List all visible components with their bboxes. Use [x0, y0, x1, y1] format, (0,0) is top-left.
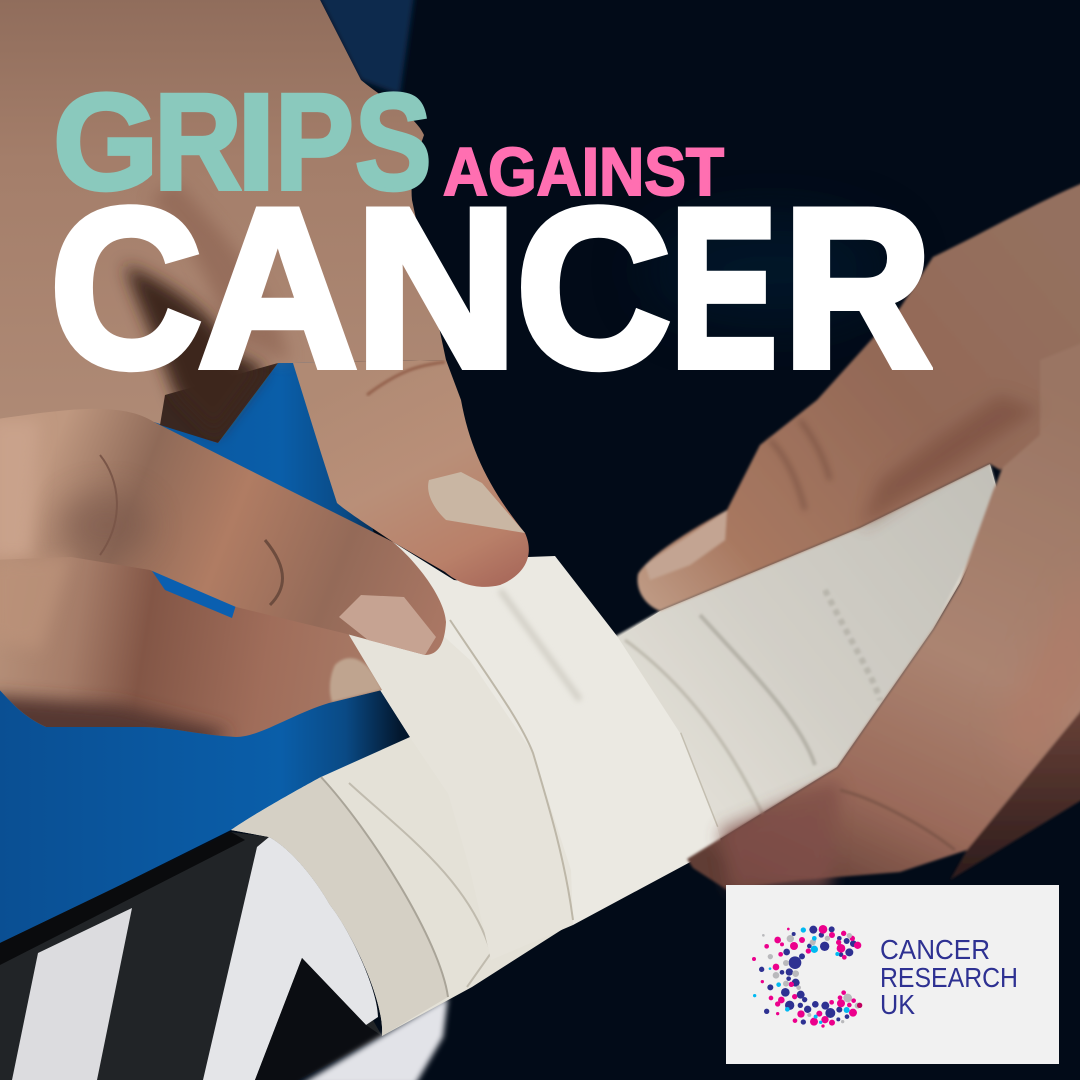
logo wordmark: UK — [880, 989, 915, 1020]
title: CANCER: C — [50, 161, 202, 414]
title: GRIPS: I — [237, 66, 275, 219]
blue kit behind left hand — [0, 0, 430, 950]
right hand — [637, 180, 1080, 890]
hockey stick blade — [0, 832, 448, 1080]
title: CANCER — [50, 161, 933, 414]
white grip tape roll — [231, 464, 1000, 1036]
tape flap being wrapped — [347, 542, 722, 960]
title: AGAINST: AGAINST — [443, 134, 724, 210]
logo wordmark — [880, 934, 1018, 1020]
title: GRIPS: S — [355, 66, 431, 219]
ring finger — [0, 530, 382, 737]
blue gap between fingers — [150, 568, 236, 618]
title: GRIPS: R — [154, 66, 242, 219]
logo wordmark: CANCER — [880, 934, 990, 965]
palm — [687, 300, 1080, 890]
back of hand and curled finger — [0, 0, 446, 560]
title: CANCER: E — [670, 161, 777, 414]
title: GRIPS — [53, 66, 431, 219]
title: CANCER: R — [783, 161, 932, 414]
index fingernail — [428, 472, 525, 533]
logo panel: Cancer Research UK — [726, 885, 1059, 1064]
title: CANCER: A — [198, 161, 357, 414]
index finger — [293, 360, 529, 587]
upper finger — [637, 180, 1080, 611]
middle fingernail — [339, 595, 436, 655]
title: CANCER: N — [355, 161, 518, 414]
title: CANCER: C — [516, 161, 671, 414]
lower finger lobe — [950, 700, 1080, 880]
middle finger — [0, 409, 446, 655]
right fingernail — [645, 510, 727, 580]
title: GRIPS: G — [53, 66, 159, 219]
left hand — [0, 0, 529, 750]
logo wordmark: RESEARCH — [880, 962, 1018, 993]
icon: dotted C logo mark — [752, 925, 862, 1028]
title: GRIPS: P — [275, 66, 354, 219]
